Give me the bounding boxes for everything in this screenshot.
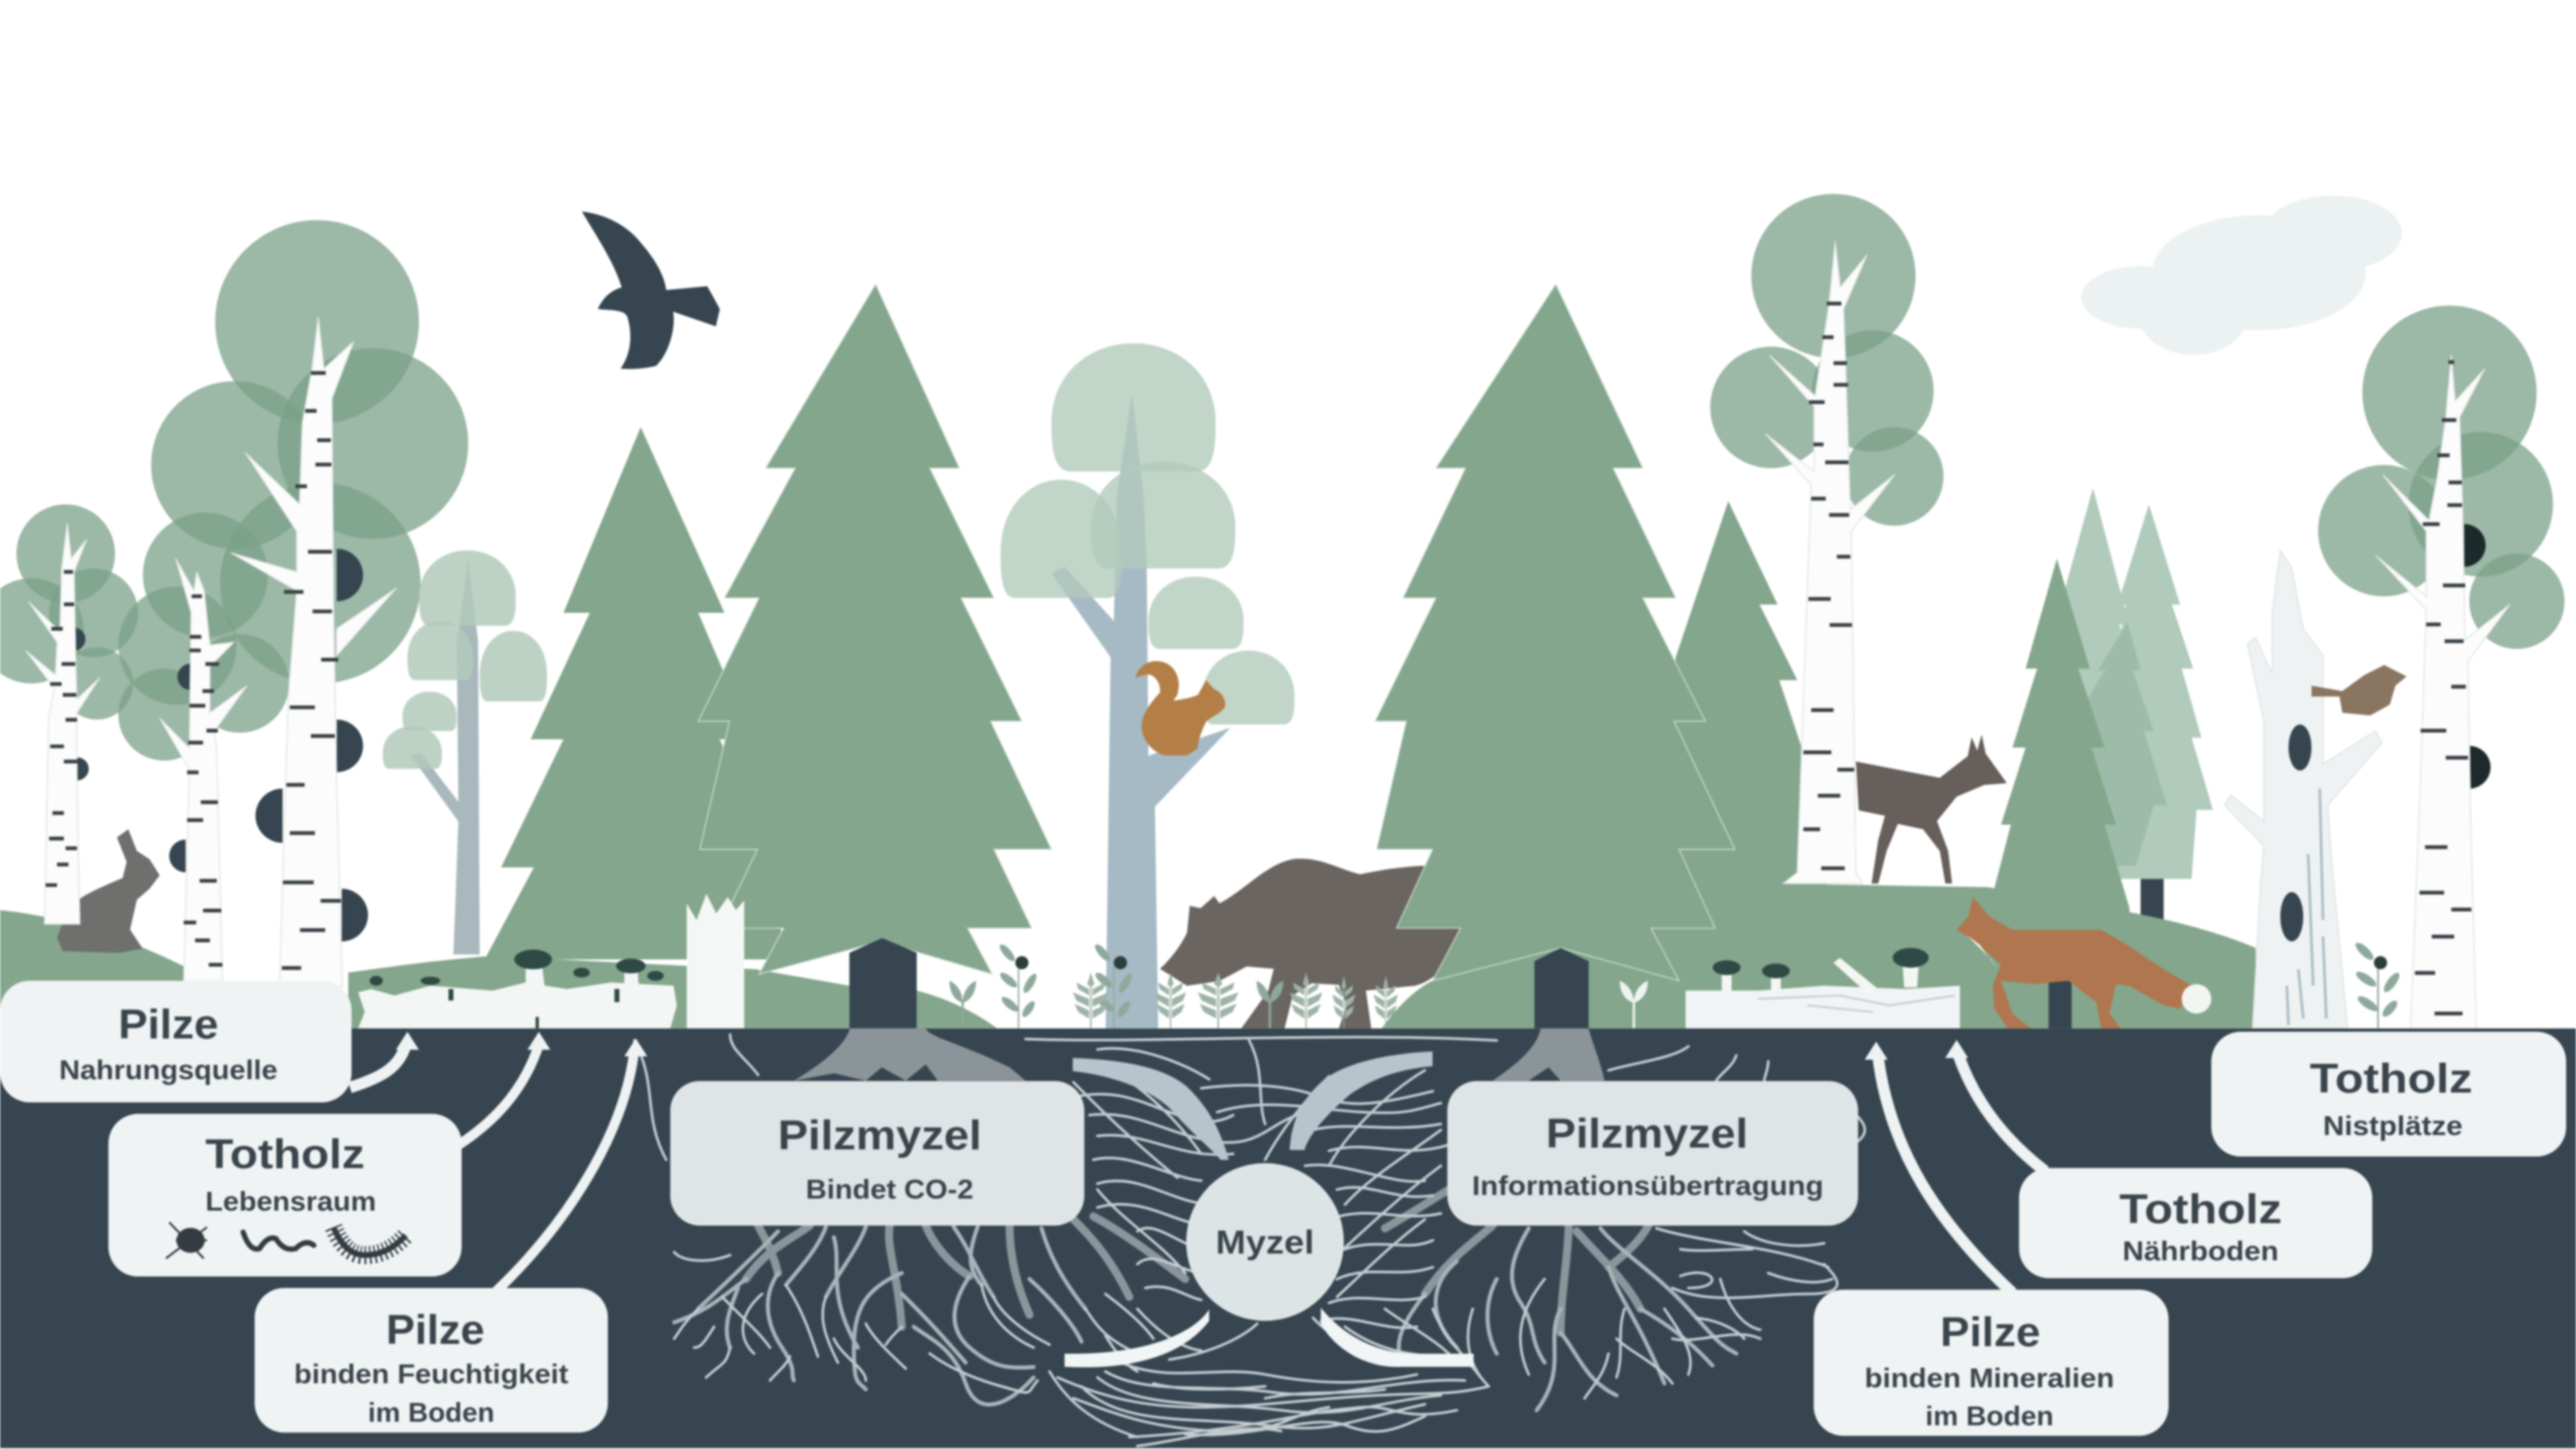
main spruce right trunk (1535, 948, 1589, 1029)
deer (1856, 734, 2007, 884)
saplings (949, 981, 1284, 1029)
ferns (1072, 972, 1398, 1029)
thick roots (746, 1190, 1648, 1333)
birch trunk: far right (2376, 355, 2510, 1029)
spruce behind right (1643, 501, 1840, 920)
node: Myzel: Myzel (1216, 1224, 1314, 1260)
arrow: Myzel lower left (1064, 1309, 1209, 1368)
dead tree stump with hollows (2224, 550, 2382, 1029)
birch bark marks (282, 373, 341, 968)
sprig with berry on trunk (1093, 942, 1134, 1029)
squirrel tree (1001, 343, 1294, 1029)
light tree with grey trunk (383, 550, 547, 954)
dead tree body (2224, 550, 2382, 1029)
small spruce trunk (2048, 970, 2072, 1029)
fox (1957, 897, 2211, 1029)
text: im Boden (368, 1399, 495, 1428)
small brown bird (2311, 665, 2407, 716)
panel: Pilzmyzel Bindet CO-2 (670, 1081, 1084, 1225)
tree hollow upper (2289, 724, 2311, 770)
icon: worm (243, 1233, 314, 1250)
main spruce left (699, 284, 1052, 1029)
fox tail tip (2182, 984, 2211, 1013)
arrow: Myzel to Pilzmyzel left (1072, 1058, 1229, 1160)
panel: Totholz Nistplätze (2211, 1031, 2566, 1157)
birch trunk: leftmost (26, 523, 100, 924)
text: Bindet CO-2 (806, 1175, 973, 1205)
log cracks (1758, 996, 1955, 1012)
panel: Totholz Nährboden (2019, 1168, 2372, 1278)
bird in flight (581, 211, 720, 369)
squirrel tree foliage (1001, 343, 1294, 724)
soil (0, 1029, 2576, 1448)
hill right of first spruce (917, 991, 997, 1029)
deadwood stump left (687, 894, 744, 1029)
heading: Totholz (2119, 1185, 2282, 1232)
tree hollow lower (2280, 892, 2303, 941)
birch bark marks (1803, 303, 1854, 869)
mushrooms right (1713, 948, 1955, 1012)
pale conifer group (2038, 488, 2213, 928)
sprig far right (2353, 940, 2402, 1029)
squirrel (1136, 661, 1225, 756)
fox chest (1967, 935, 1997, 970)
medium roots (674, 1227, 1736, 1411)
deadwood log left (358, 982, 677, 1029)
right hill (1382, 884, 2256, 1029)
cloud (2081, 196, 2402, 355)
heading: Pilze (386, 1306, 485, 1352)
text: Informationsübertragung (1472, 1172, 1824, 1201)
pale conifer left (2038, 488, 2156, 821)
panel: Totholz Lebensraum (108, 1114, 462, 1276)
arrow: Pilze Nahrungsquelle up (350, 1031, 419, 1088)
birch trunk: right near the hill (1766, 242, 1895, 884)
heading: Pilzmyzel (778, 1112, 981, 1158)
light tree trunk (411, 558, 479, 954)
arrow: Pilze Mineralien up (1865, 1041, 2012, 1293)
birch foliage: right tree by the hill (1710, 194, 1944, 526)
birch foliage: far right tree (2318, 306, 2564, 649)
pale conifer trunk (2140, 879, 2164, 928)
panel: Pilze Feuchtigkeit (255, 1288, 608, 1433)
node: Myzel (1186, 1163, 1343, 1321)
icon: beetle (166, 1223, 207, 1258)
left hill (0, 911, 353, 1029)
forest floor plants (949, 940, 2402, 1029)
main spruce trunk (850, 938, 917, 1029)
panel: Pilzmyzel Informationsübertragung (1447, 1081, 1858, 1225)
white sapling (1620, 981, 1648, 1029)
text: Nahrungsquelle (59, 1056, 277, 1086)
arrow: Myzel lower right (1321, 1308, 1474, 1367)
text: im Boden (1926, 1402, 2054, 1431)
woodpecker holes on birches (74, 524, 2490, 941)
pale conifer right (2087, 504, 2213, 879)
root and mycelium network (634, 1029, 1865, 1446)
text: binden Mineralien (1865, 1364, 2114, 1394)
heading: Totholz (206, 1131, 365, 1177)
bark streaks (2287, 789, 2326, 1025)
text: Nährboden (2123, 1237, 2279, 1267)
squirrel tree trunk (1052, 394, 1231, 1029)
spruce behind left (485, 428, 797, 960)
sprig with berry (997, 942, 1038, 1029)
text: binden Feuchtigkeit (294, 1360, 569, 1390)
berries (1015, 956, 2387, 970)
panel: Pilze Nahrungsquelle (0, 981, 352, 1102)
tree root flares (794, 1029, 1605, 1080)
heading: Pilze (1940, 1309, 2040, 1355)
fine mycelium threads (634, 1035, 1865, 1446)
heading: Pilzmyzel (1546, 1110, 1748, 1157)
birch bark marks (46, 572, 79, 886)
birch bark marks (2415, 362, 2471, 1013)
middle-left hill (348, 956, 850, 1029)
birch foliage: left trio (0, 220, 468, 760)
arrow: Totholz Nährboden up (1945, 1040, 2046, 1172)
text: Nistplätze (2323, 1112, 2462, 1141)
mushrooms left (369, 950, 664, 1029)
birch trunk: second left (160, 558, 247, 981)
heading: Totholz (2309, 1055, 2472, 1101)
light tree foliage (383, 550, 547, 769)
deadwood log right (1685, 986, 1960, 1029)
mid-tone conifer (2067, 623, 2167, 866)
icon: millipede (334, 1227, 406, 1255)
arrow: Totholz Lebensraum up (458, 1031, 550, 1145)
main spruce right (1375, 284, 1735, 1029)
text: Lebensraum (206, 1188, 377, 1217)
heading: Pilze (118, 1001, 218, 1047)
birch trunk: big left (231, 318, 396, 987)
small spruce (1985, 558, 2136, 1029)
birch bark marks (183, 597, 223, 965)
arrow: Pilze Feuchtigkeit up (496, 1038, 648, 1292)
rabbit (57, 829, 160, 953)
arrow: Myzel to Pilzmyzel right (1290, 1052, 1433, 1150)
panel: Pilze Mineralien (1814, 1290, 2168, 1436)
bear (1160, 859, 1468, 1029)
